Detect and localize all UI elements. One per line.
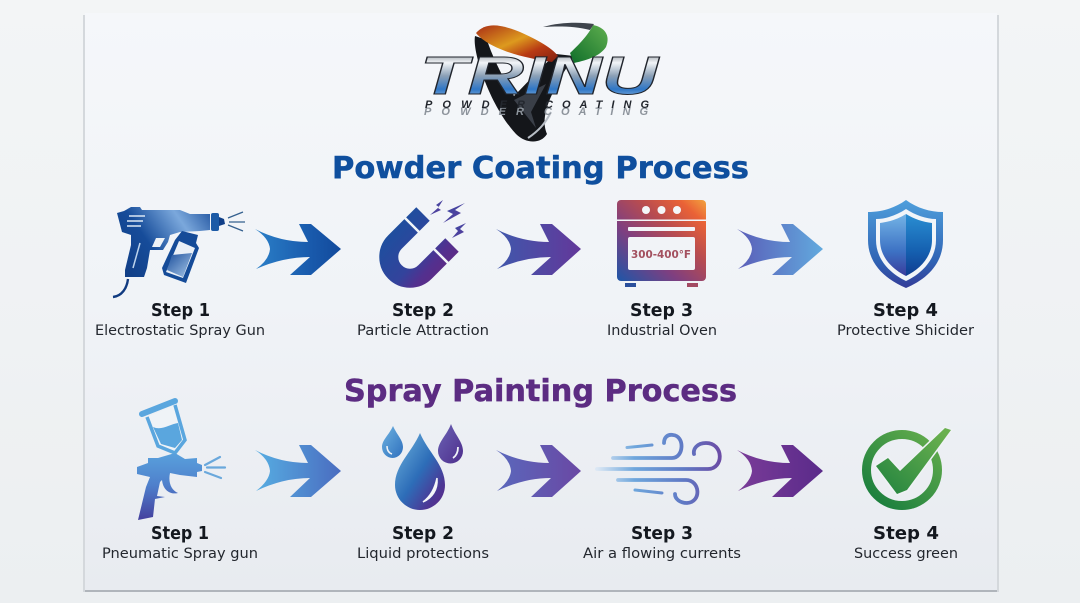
logo tagline — [425, 99, 649, 111]
step 1 text: Pneumatic Spray gun — [102, 546, 258, 562]
heading: spray painting: Spray Painting Process — [344, 374, 737, 409]
step 3 text — [583, 523, 741, 562]
icon: green check — [866, 428, 951, 506]
step 2 text: Liquid protections — [357, 546, 489, 562]
logo green leaf — [570, 25, 608, 63]
logo dark swoosh ring — [475, 36, 574, 142]
panel: spray painting process — [102, 374, 958, 562]
arrow 1 — [255, 224, 341, 275]
icon: magnet — [389, 200, 466, 278]
logo tagline shadow: POWDER — [424, 106, 524, 118]
logo red leaf — [476, 25, 558, 62]
arrow 3 — [737, 224, 823, 275]
icon: industrial oven — [617, 200, 706, 287]
step 2 text: Particle Attraction — [357, 323, 489, 339]
arrow 3 — [737, 445, 823, 497]
step 3 text: Step 3 — [631, 523, 693, 544]
logo tagline shadow: COATING — [544, 106, 648, 118]
step 1 text: Step 1 — [151, 300, 210, 321]
arrow 2 — [496, 224, 581, 275]
oven temperature: 300-400°F — [631, 249, 691, 261]
lightning bolts — [430, 200, 466, 238]
step 4 text: Success green — [854, 546, 958, 562]
step 4 text: Step 4 — [873, 523, 939, 544]
logo wordmark: TRINU — [420, 46, 661, 106]
step 1 text — [95, 300, 265, 339]
logo: Trinu Powder Coating — [420, 23, 661, 141]
arrow 1 — [255, 445, 341, 497]
step 4 text: Step 4 — [873, 300, 938, 321]
icon: protective shield — [868, 200, 943, 288]
logo silver tip — [543, 23, 594, 30]
step 2 text — [357, 523, 489, 562]
card bottom edge shadow — [85, 589, 997, 592]
icon: liquid drops — [382, 424, 463, 510]
icon: air currents — [597, 435, 720, 503]
logo tagline: POWDER — [425, 99, 525, 111]
step 4 text — [854, 523, 958, 562]
panel: powder coating process — [95, 151, 974, 339]
step 3 text: Industrial Oven — [607, 323, 717, 339]
step 2 text: Step 2 — [392, 523, 454, 544]
step 4 text — [837, 300, 974, 339]
step 1 text: Electrostatic Spray Gun — [95, 323, 265, 339]
logo tagline: COATING — [545, 99, 649, 111]
icon: pneumatic spray gun — [137, 401, 225, 520]
step 1 text — [102, 523, 258, 562]
step 1 text: Step 1 — [151, 523, 209, 544]
arrow 2 — [496, 445, 581, 497]
step 3 text: Air a flowing currents — [583, 546, 741, 562]
logo tagline shadow — [424, 106, 648, 118]
icon: electrostatic spray gun — [113, 207, 245, 297]
step 3 text — [607, 300, 717, 339]
step 3 text: Step 3 — [630, 300, 693, 321]
step 4 text: Protective Shicider — [837, 323, 974, 339]
heading: powder coating: Powder Coating Process — [332, 151, 749, 186]
step 2 text: Step 2 — [392, 300, 454, 321]
step 2 text — [357, 300, 489, 339]
